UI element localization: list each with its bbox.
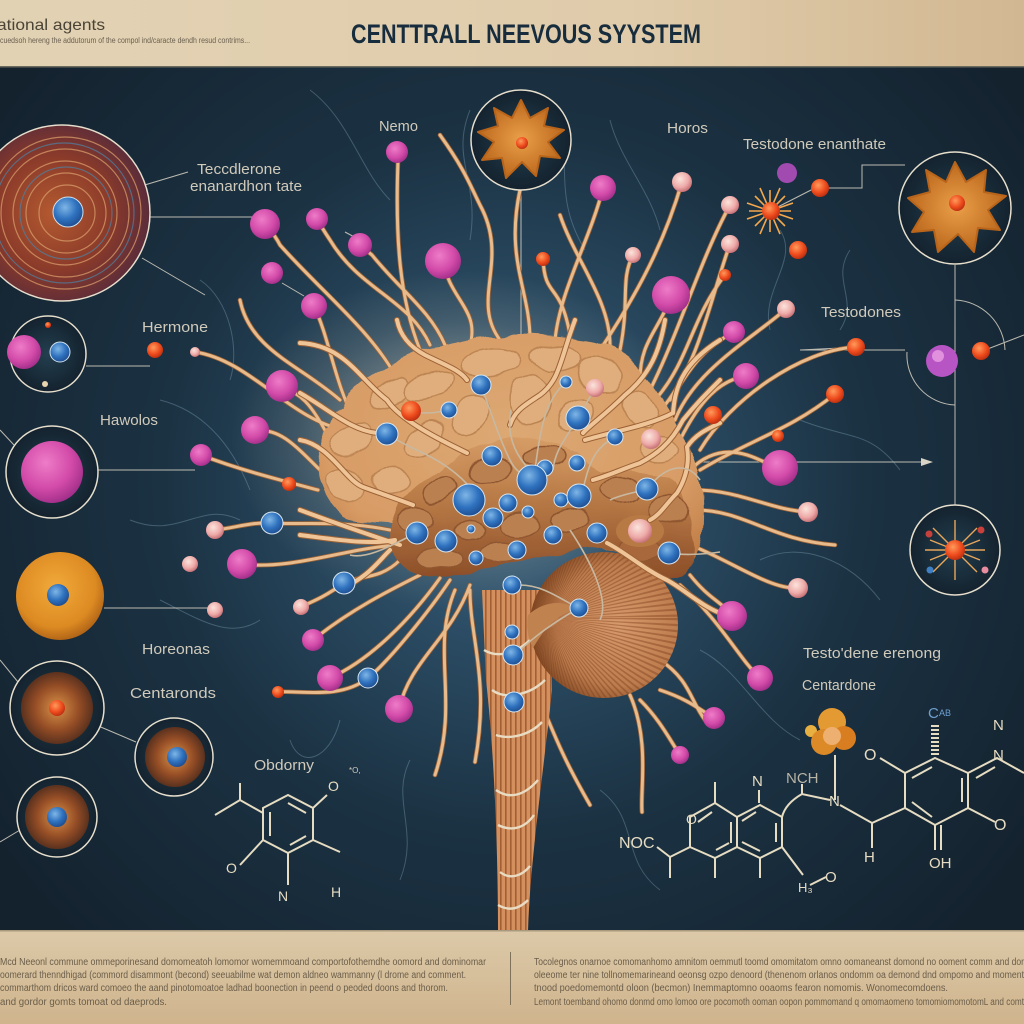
molecule atom labels: N [752,773,763,790]
labels: *O, [349,766,361,775]
molecule atom labels: AB [939,708,951,718]
panel: bottom-left brown cell [17,777,97,857]
labels: Horeonas [142,642,210,658]
brain gyri upper [321,345,678,506]
molecule atom labels: NOC [619,835,655,852]
panel: large layered disc [0,125,150,301]
labels: Obdorny [254,758,315,774]
molecule: lower-right structure [657,755,1024,885]
molecule atom labels: O [864,747,876,764]
faint background nerve wisps [130,90,900,890]
panel: top receptor circle [471,90,571,190]
header banner [0,0,1024,68]
pink neuron nodes [190,141,798,764]
panel: right purple node [926,345,958,377]
glow behind brain [230,270,690,610]
molecule atom labels: H [864,849,875,866]
header banner: cuedsoh hereng the addutorum of the compol ind/caracte dendh resud contrims... [0,36,250,45]
nerve fibers over brain [300,320,720,613]
footer left text: and gordor gomts tomoat od daeprods. [0,997,167,1008]
cerebellum [527,552,678,698]
peach neuron nodes [182,172,818,618]
molecule atom labels: OH [929,855,952,872]
labels: Testodone enanthate [743,137,886,153]
footer left text [0,957,487,1008]
molecule: lower-left structure [215,778,341,904]
panel: top-right receptor circle [899,152,1011,264]
labels: Testo'dene erenong [803,646,941,662]
molecule atom labels: N [993,717,1004,734]
footer banner [0,930,1024,1024]
footer right text: tnood poedomemontd oloon (becmon) Inemmaptomno ooaoms fearon nomomis. Wonomecomdoens. [534,983,948,994]
molecule hash bond [931,725,939,755]
brain upper lobe [318,335,702,577]
small receptor star [747,163,797,234]
molecule atom labels: O [994,817,1006,834]
orange-red neuron nodes [147,179,990,698]
footer right text [534,957,1024,1008]
molecule atom labels: N [993,747,1004,764]
labels: Hawolos [100,413,158,429]
labels: Nemo [379,119,418,135]
panel: left orange ball [16,552,104,640]
footer left text: Mcd Neeonl commune ommeporinesand domomeatoh lomomor womemmoand comportofothemdhe oomord and dominomar [0,957,487,968]
labels: Centaronds [130,686,216,702]
connector lines [0,165,1024,842]
molecule atom labels: H₃ [798,880,813,895]
molecule atom labels: C [928,705,939,722]
nerve fibers [195,135,856,812]
molecule: lower-left structure: N [278,888,288,904]
panel: centre-left brown cell [135,718,213,796]
panel: left pink and blue circle [7,316,86,392]
labels: Hermone [142,320,208,336]
footer left text: oomerard thenndhigad (commord disammont (becond) seeuabilme wat demon aldneo wammanny (l drome and comment. [0,970,466,981]
labels: Horos [667,121,708,137]
molecule: lower-left structure: O [328,778,339,794]
molecule atom labels: N [829,793,840,810]
molecule atom labels: O [686,811,697,827]
molecule: lower-left structure: H [331,884,341,900]
panel: left pink ball circle [6,426,98,518]
arrow head [921,458,933,466]
labels: Testodones [821,305,901,321]
brain lower lobe [389,438,693,577]
blue neuron nodes [261,375,680,712]
labels: Centardone [802,678,876,694]
thin fibers on brain [350,382,720,655]
labels: enanardhon tate [190,179,302,195]
labels: Teccdlerone [197,162,281,178]
brain [318,335,702,577]
brain stem and spinal cord [482,590,552,931]
molecule orange blob [805,708,856,755]
brain gyri lower [397,445,688,569]
molecule atom labels: NCH [786,770,818,787]
title: CENTTRALL NEEVOUS SYYSTEM [351,19,701,49]
molecule atom labels: O [825,869,837,886]
labels [100,119,941,775]
molecule atom labels [619,705,1006,895]
footer divider [510,952,511,1005]
molecule: lower-left structure: O [226,860,237,876]
footer left text: commarthom dricos ward comoeo the aand pinotomoatoe ladhad boonection in peend o peoded doons and thorom. [0,983,448,994]
panel: left brown cell [10,661,104,755]
panel: right lower receptor circle [910,505,1000,595]
